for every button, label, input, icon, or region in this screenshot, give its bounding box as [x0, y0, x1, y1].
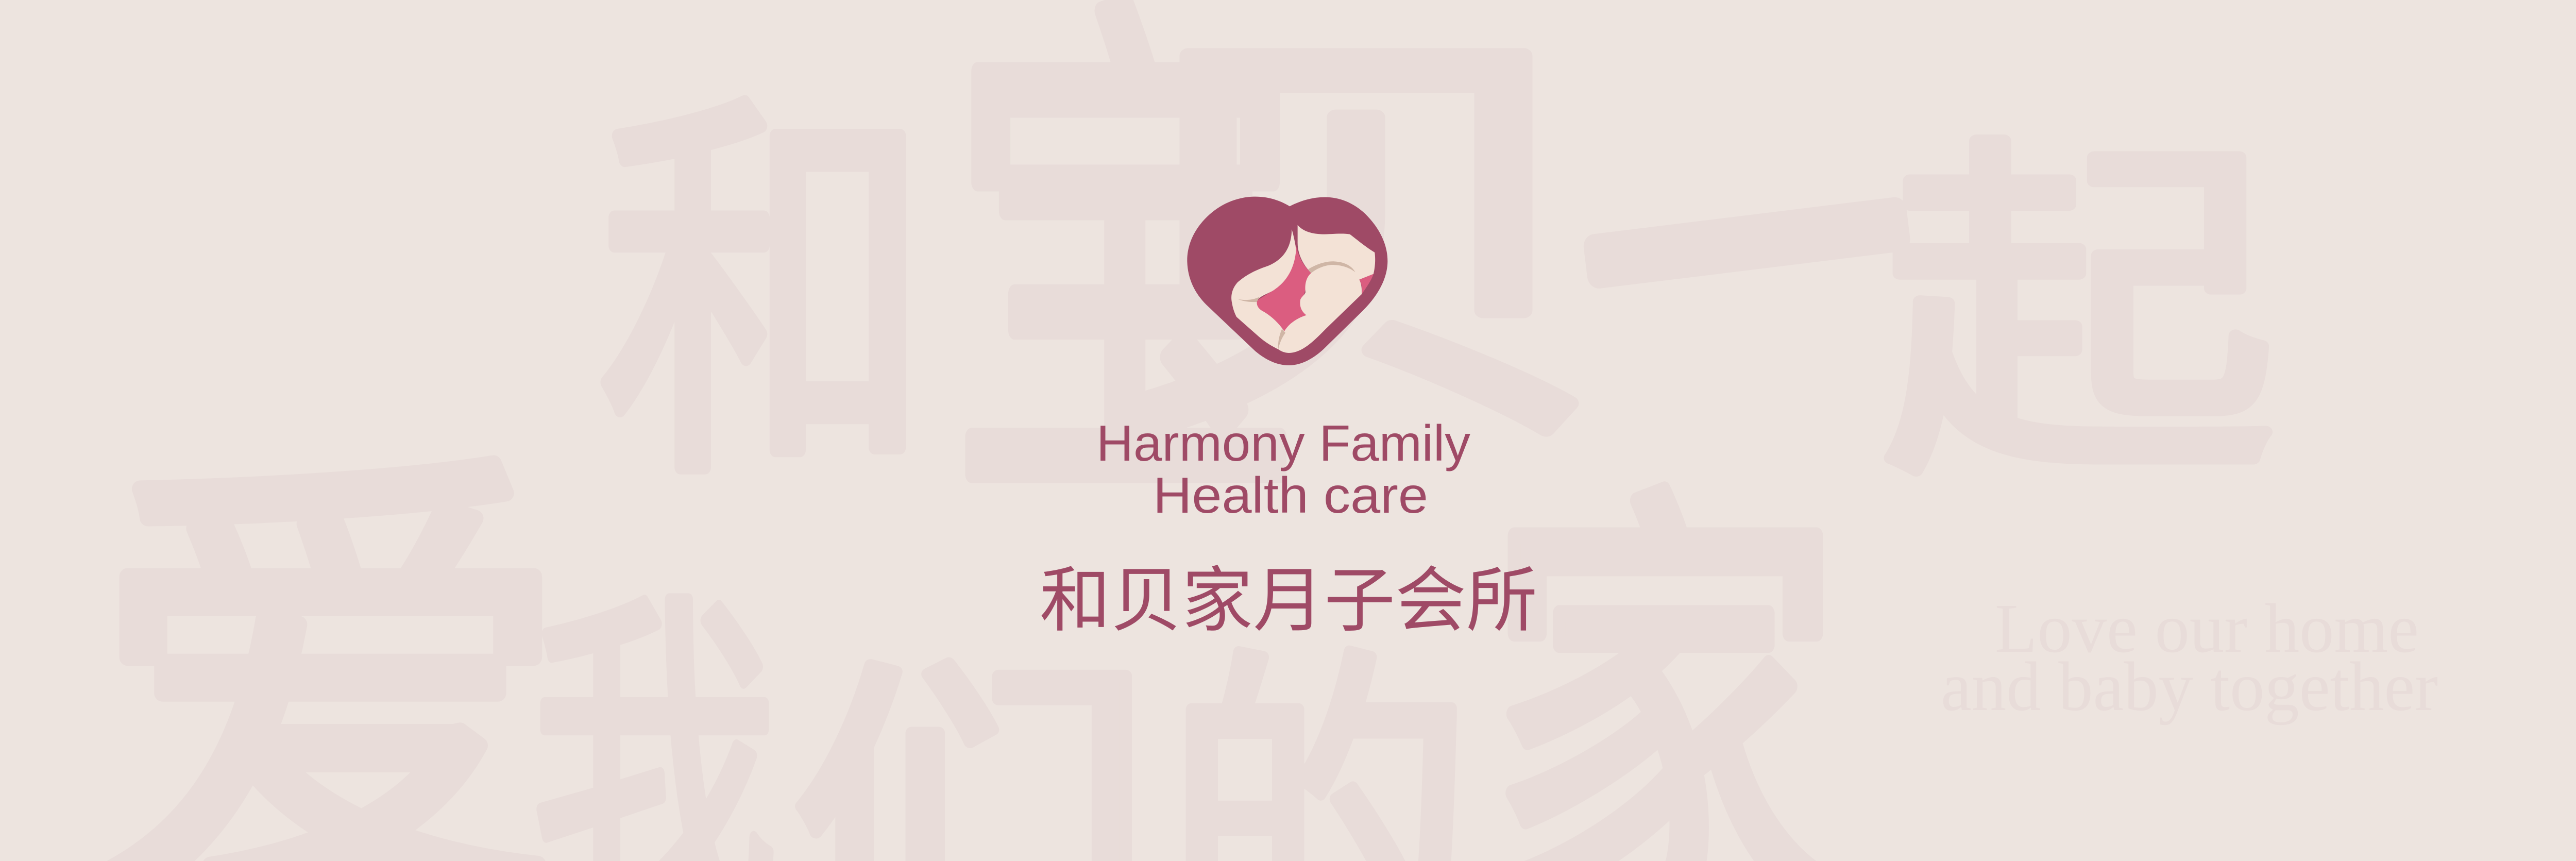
mother's arm skin: [1231, 229, 1296, 349]
calligraphy watermark: top line: 贝: [1097, 5, 1613, 488]
slogan watermark: and baby together: [1941, 648, 2438, 725]
mother's face and baby skin: [1279, 225, 1375, 353]
calligraphy watermark: top line: 起: [1880, 117, 2277, 514]
brand name in English: Harmony Family: [1096, 415, 1470, 471]
brand name in English: [1096, 415, 1470, 524]
shading on the baby's head: [1308, 261, 1355, 273]
calligraphy watermark: top line: [614, 13, 2255, 465]
calligraphy watermark: top line: 一: [1560, 39, 1936, 479]
slogan watermark: [1941, 590, 2438, 725]
shading under the arm: [1238, 297, 1260, 302]
calligraphy watermark: top line: 和: [598, 73, 933, 522]
slogan watermark: Love our home: [1995, 590, 2419, 667]
brand name in Chinese: 和贝家月子会所: [1040, 561, 1537, 640]
heart outline: [1187, 197, 1387, 365]
brand name in English: Health care: [1153, 467, 1428, 524]
pink garment: [1257, 244, 1311, 333]
garment sliver on the right: [1359, 274, 1374, 294]
icon: heart logo, mother and baby: [1187, 197, 1387, 365]
calligraphy watermark: bottom line: [136, 474, 1795, 861]
shading at the baby's leg: [1278, 329, 1285, 349]
